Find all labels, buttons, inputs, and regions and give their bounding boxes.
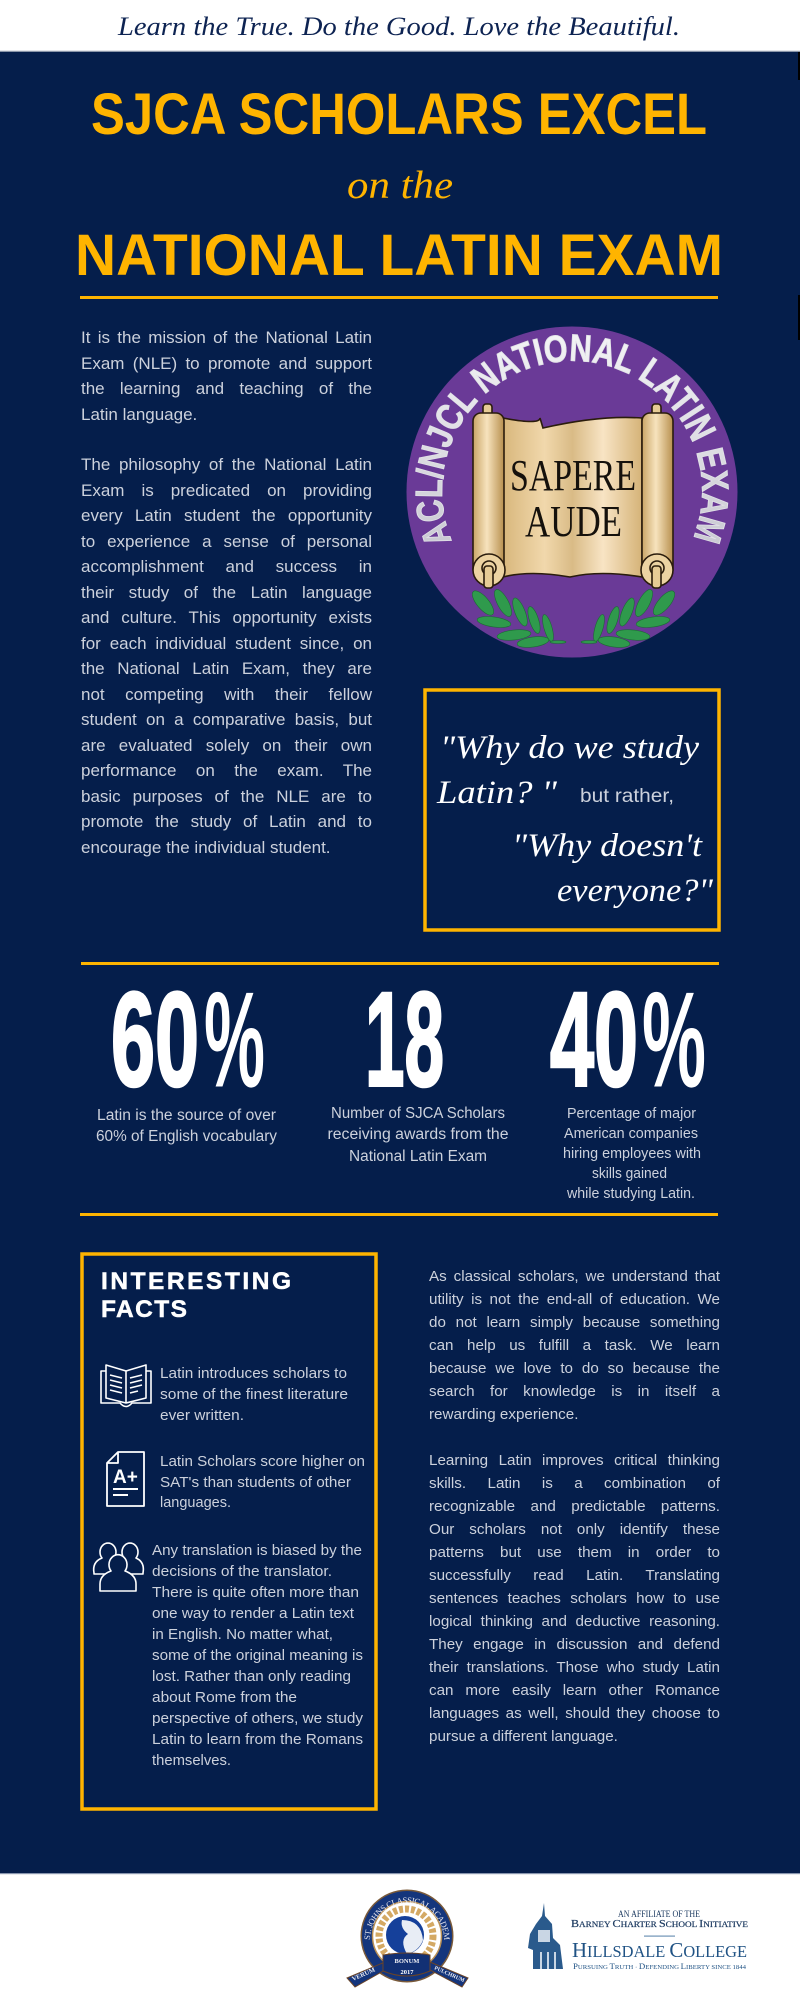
tower [528,1903,563,1969]
intro paragraph: philosophy: basic purposes of the NLE are to [81,787,372,806]
affiliate text [571,1909,748,1971]
fact 1 [160,1365,348,1424]
icon: graded paper [107,1452,144,1506]
affiliate text: BARNEY CHARTER SCHOOL INITIATIVE [571,1919,748,1930]
fact 3: about Rome from the [152,1689,297,1706]
fact 1: Latin introduces scholars to [160,1365,347,1382]
intro paragraph: philosophy: to experience a sense of personal [81,532,372,551]
stat: 18: National Latin Exam [349,1148,487,1165]
seal ring lettering: ACL/NJCL NATIONAL LATIN EXAM [415,334,729,544]
quote text: "Why do we study [440,730,699,766]
stat: 40%: % [642,964,706,1116]
intro paragraph: philosophy: for each individual student since, on [81,634,372,653]
facts heading: FACTS [101,1296,187,1323]
intro paragraph: philosophy: encourage the individual student. [81,838,331,857]
right column paragraph: critical thinking: skills. Latin is a combination of [429,1474,720,1492]
stat: 60% [96,964,277,1145]
scroll motto: AUDE [525,497,622,546]
fact 3: perspective of others, we study [152,1710,363,1727]
affiliate text: AN AFFILIATE OF THE [618,1909,700,1919]
icon: open book [101,1365,151,1406]
right column paragraph: critical thinking: sentences teaches scholars how to use [429,1590,720,1606]
stat: 40%: skills gained [592,1165,667,1182]
intro paragraph: mission: Latin language. [81,405,197,424]
footer band [0,1874,800,2000]
fact 3 [152,1542,363,1769]
intro paragraph: philosophy: their study of the Latin language [81,583,372,602]
fact 3: some of the original meaning is [152,1647,363,1664]
fact 2: SAT's than students of other [160,1474,351,1491]
right column paragraph: classical scholars [429,1268,720,1422]
quote text [436,730,713,909]
intro paragraph: philosophy: are evaluated solely on their own [81,736,372,755]
right column paragraph: critical thinking: Our scholars not only identify these [429,1520,720,1538]
logo: St. Johns Classical Academy seal: 2017 [400,1969,414,1976]
intro paragraph: philosophy: student on a comparative basis, but [81,710,372,729]
stat: 60%: Latin is the source of over [97,1107,276,1124]
title: NATIONAL LATIN EXAM [75,223,723,288]
right column paragraph: critical thinking: patterns but use them in order to [429,1544,720,1560]
right column paragraph: critical thinking: languages as well, should they choose to [429,1704,720,1722]
right column paragraph: classical scholars: can help us fulfill a task. We learn [429,1336,720,1354]
fact 1: ever written. [160,1407,244,1424]
right column paragraph: critical thinking: successfully read Latin. Translating [429,1566,720,1584]
stat: 40%: 40 [550,966,638,1114]
right column paragraph: critical thinking: logical thinking and deductive reasoning. [429,1612,720,1630]
stat: 18: 18 [365,966,444,1114]
stat: 40%: hiring employees with [563,1145,701,1162]
National Latin Exam seal [406,326,738,658]
fact 3: Latin to learn from the Romans [152,1731,363,1748]
right column paragraph: critical thinking: Learning Latin improves critical thinking [429,1452,720,1468]
facts heading: INTERESTING [101,1268,291,1295]
affiliate text: HILLSDALE COLLEGE [572,1938,747,1962]
stat: 40%: Percentage of major [567,1105,696,1122]
stat: 18: Number of SJCA Scholars [331,1105,505,1122]
stat: 60%: 60% of English vocabulary [96,1128,277,1145]
fact 3: Any translation is biased by the [152,1542,362,1559]
right column paragraph: critical thinking: their translations. Those who study Latin [429,1658,720,1676]
right column paragraph: critical thinking [429,1452,720,1744]
right column paragraph: classical scholars: rewarding experience. [429,1406,578,1422]
fact 3: lost. Rather than only reading [152,1668,351,1685]
logo: St. Johns Classical Academy seal: BONUM [395,1958,419,1965]
affiliate text: PURSUING TRUTH · DEFENDING LIBERTY SINCE 1844 [573,1961,747,1971]
title [75,82,723,288]
intro paragraph: philosophy: every Latin student the opportunity [81,506,372,525]
stat: 40%: American companies [564,1125,698,1142]
laurel branches [469,587,678,649]
right column paragraph: critical thinking: recognizable and predictable patterns. [429,1498,720,1514]
logo: St. Johns Classical Academy seal [346,1890,469,1988]
intro paragraph: philosophy: not competing with their fellow [81,685,372,704]
tagline: Learn the True. Do the Good. Love the Beautiful. [117,12,680,41]
intro paragraph: philosophy: Exam is predicated on providing [81,481,372,500]
right column paragraph: critical thinking: pursue a different language. [429,1728,618,1744]
title: SJCA SCHOLARS EXCEL [91,82,707,147]
quote text: everyone?" [557,873,713,909]
fact 2 [160,1453,365,1511]
intro paragraph: philosophy: accomplishment and success in [81,557,372,576]
intro paragraph: mission: It is the mission of the National Latin [81,328,372,347]
logo: St. Johns Classical Academy seal: PULCHRUM [433,1965,466,1984]
fact 1: some of the finest literature [160,1386,348,1403]
right column paragraph: classical scholars: search for knowledge is in itself a [429,1382,720,1400]
fact 3: There is quite often more than [152,1584,359,1601]
stat: 40%: while studying Latin. [566,1185,695,1202]
logo: St. Johns Classical Academy seal: ST. JOHNS CLASSICAL ACADEMY [364,1897,450,1940]
fact 3: in English. No matter what, [152,1626,333,1643]
fact 2: languages. [160,1494,231,1511]
intro paragraph: philosophy: and culture. This opportunity exists [81,608,372,627]
icon: graded paper: A+ [113,1467,138,1488]
right column paragraph: classical scholars: utility is not the end-all of education. We [429,1290,720,1308]
intro paragraph: philosophy: promote the study of Latin and to [81,812,372,831]
quote box [425,690,719,930]
stat: 18 [328,966,508,1165]
intro paragraph: mission [81,328,372,424]
but rather: but rather, [580,786,674,807]
title: on the [347,164,453,207]
intro paragraph: mission: Exam (NLE) to promote and support [81,354,372,373]
right column paragraph: classical scholars: do not learn simply because something [429,1314,720,1330]
logo: St. Johns Classical Academy seal: VERUM [351,1966,376,1983]
fact 3: themselves. [152,1752,231,1769]
right column paragraph: classical scholars: because we love to do so because the [429,1360,720,1376]
panel: interesting facts [82,1254,376,1809]
intro paragraph: philosophy [81,455,372,857]
intro paragraph: philosophy: performance on the exam. The [81,761,372,780]
stat: 40% [550,964,706,1202]
scroll motto [510,451,636,546]
icon: people [94,1543,143,1591]
right column paragraph: critical thinking: can more easily learn other Romance [429,1682,720,1698]
right column paragraph: critical thinking: They engage in discussion and defend [429,1636,720,1652]
fact 3: decisions of the translator. [152,1563,332,1580]
intro paragraph: philosophy: The philosophy of the National Latin [81,455,372,474]
logo: Hillsdale College [528,1903,748,1971]
intro paragraph: mission: the learning and teaching of the [81,379,372,398]
scroll [473,404,673,588]
scroll motto: SAPERE [510,451,636,500]
quote text: "Why doesn't [512,828,703,864]
right column paragraph: classical scholars: As classical scholars, we understand that [429,1268,720,1284]
fact 3: one way to render a Latin text [152,1605,355,1622]
stat: 18: receiving awards from the [328,1126,508,1143]
fact 2: Latin Scholars score higher on [160,1453,365,1470]
quote text: Latin? " [436,775,557,811]
stat: 60%: % [204,964,265,1116]
stat: 60%: 60 [111,966,199,1114]
facts heading [101,1268,291,1323]
intro paragraph: philosophy: the National Latin Exam, they are [81,659,372,678]
